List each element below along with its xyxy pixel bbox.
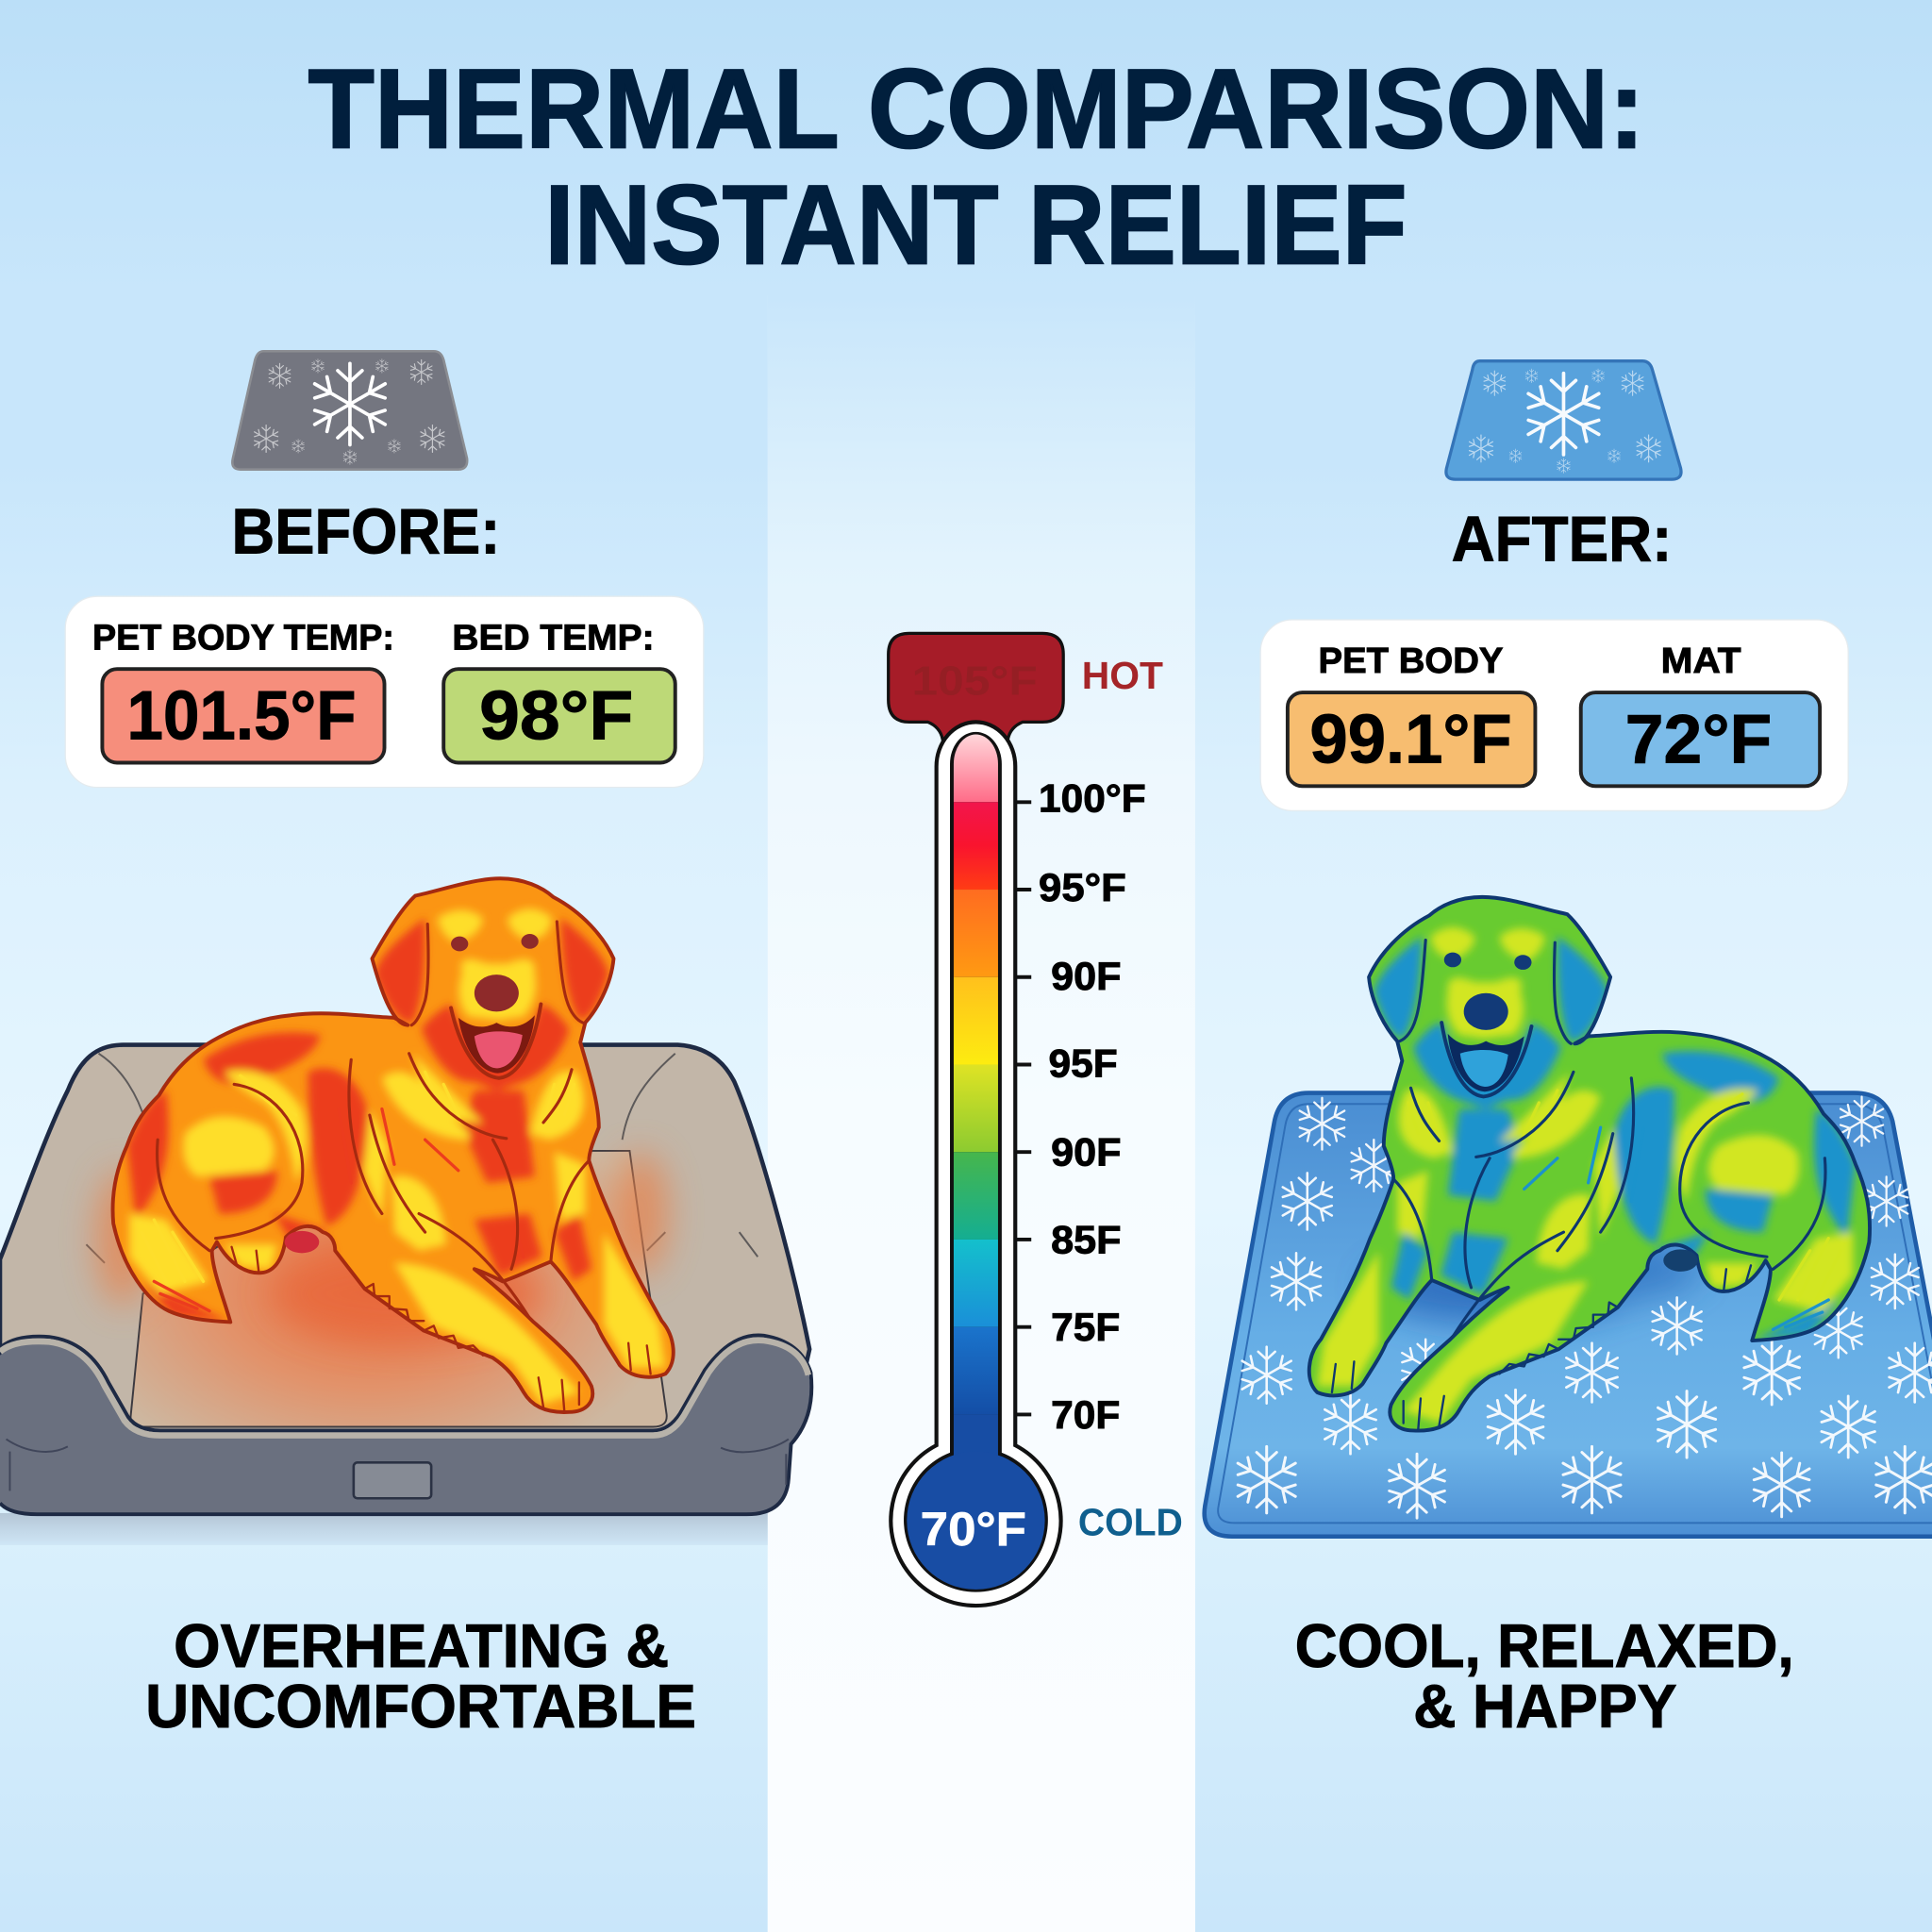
illustration: dog bed: [0, 1045, 811, 1545]
card: before temperatures: 98°F: [479, 678, 633, 755]
caption: overheating: [145, 1611, 696, 1740]
panel: after: [1205, 361, 1932, 1740]
illustration: cooling mat: [1205, 1093, 1932, 1537]
thermometer head: 105°F: [912, 659, 1038, 705]
label: hot: HOT: [1082, 654, 1163, 697]
title: THERMAL COMPARISON:: [308, 46, 1645, 173]
scale ticks and labels: 90F: [1051, 1130, 1122, 1174]
card: after temperatures: 72°F: [1625, 701, 1772, 777]
scale ticks and labels: 85F: [1051, 1217, 1122, 1261]
thermometer body and bulb: 70°F: [921, 1503, 1026, 1556]
panel: before: [0, 351, 811, 1740]
card: after temperatures: MAT: [1661, 641, 1741, 681]
heading: after: AFTER:: [1452, 504, 1672, 575]
scale ticks and labels: 95°F: [1039, 865, 1126, 909]
illustration: overheating dog: [113, 878, 674, 1412]
scale ticks and labels: 100°F: [1039, 776, 1146, 821]
title: INSTANT RELIEF: [544, 162, 1407, 289]
label: cold: COLD: [1078, 1500, 1183, 1543]
illustration: cool dog: [1309, 897, 1870, 1431]
card: after temperatures: [1260, 620, 1848, 810]
thermometer head: [889, 633, 1063, 740]
scale ticks and labels: [1017, 776, 1146, 1437]
card: before temperatures: [65, 596, 704, 788]
card: before temperatures: BED TEMP:: [452, 618, 655, 658]
caption: cool: [1295, 1611, 1794, 1740]
thermometer body and bulb: [891, 722, 1061, 1606]
card: before temperatures: PET BODY TEMP:: [92, 618, 394, 658]
scale ticks and labels: 90F: [1051, 954, 1122, 998]
icon: blue cooling mat: [1446, 361, 1681, 479]
scale ticks and labels: 70F: [1051, 1392, 1120, 1437]
caption: overheating: UNCOMFORTABLE: [145, 1672, 696, 1740]
heading: before: BEFORE:: [232, 496, 500, 567]
scale ticks and labels: 95F: [1049, 1041, 1118, 1086]
icon: grey cooling mat: [232, 351, 467, 470]
card: after temperatures: PET BODY: [1319, 641, 1503, 681]
card: before temperatures: 101.5°F: [127, 678, 356, 755]
caption: cool: COOL, RELAXED,: [1295, 1611, 1794, 1680]
caption: cool: & HAPPY: [1413, 1672, 1677, 1740]
caption: overheating: OVERHEATING &: [174, 1611, 669, 1680]
card: after temperatures: 99.1°F: [1309, 701, 1512, 777]
panel: thermometer: [889, 633, 1183, 1606]
scale ticks and labels: 75F: [1051, 1305, 1120, 1349]
title: [308, 46, 1645, 289]
